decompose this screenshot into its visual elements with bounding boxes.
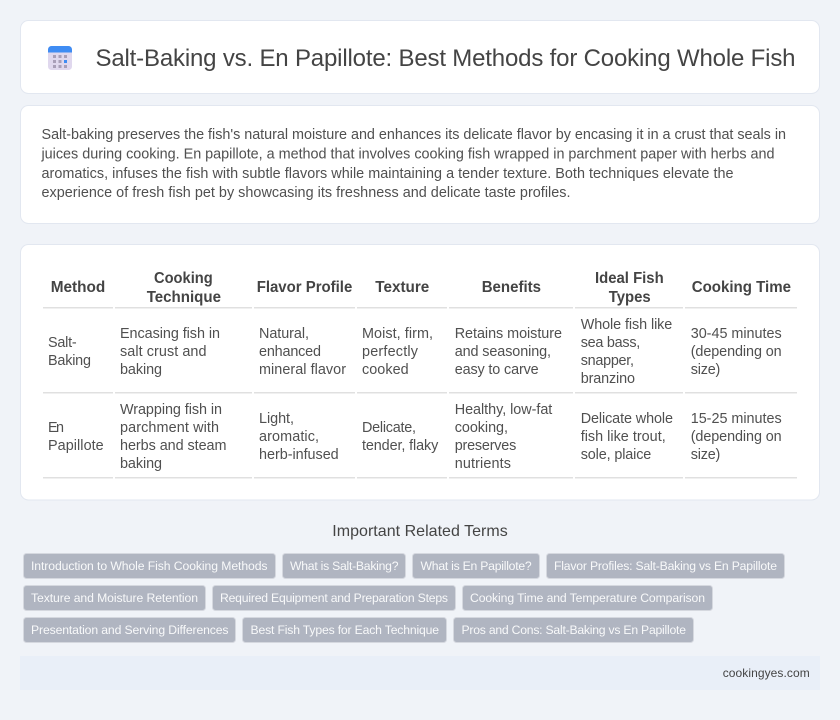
table row: Salt-Baking: Moist, firm,	[362, 326, 433, 342]
table row: Salt-Baking: Baking	[48, 353, 91, 369]
table row: En Papillote: Healthy, low-fat	[455, 402, 552, 418]
footer: cookingyes.com	[723, 666, 810, 680]
chip	[462, 586, 712, 610]
chip: Flavor Profiles: Salt-Baking vs En Papillote	[554, 559, 777, 573]
table row: En Papillote: preserves	[455, 438, 516, 454]
chip	[212, 586, 456, 610]
chip: Pros and Cons: Salt-Baking vs En Papillote	[462, 623, 686, 637]
table row: En Papillote: Delicate,	[362, 420, 416, 436]
related terms chips	[24, 554, 784, 642]
table row: Salt-Baking: perfectly	[362, 344, 419, 360]
panel: introduction	[20, 106, 820, 224]
table row: Salt-Baking: Natural,	[259, 326, 309, 342]
footer	[20, 656, 820, 690]
chip	[24, 554, 276, 578]
table row: En Papillote: Papillote	[48, 438, 104, 454]
table row: Salt-Baking: Whole fish like	[581, 317, 672, 333]
table header row: Cooking	[154, 270, 213, 287]
table row: Salt-Baking: Encasing fish in	[120, 326, 220, 342]
table row: En Papillote: herbs and steam	[120, 438, 226, 454]
table row: En Papillote: cooking,	[455, 420, 508, 436]
table row: En Papillote: tender, flaky	[362, 438, 439, 454]
table header row: Texture	[375, 279, 430, 296]
text block: intro paragraph	[40, 127, 786, 201]
table row: En Papillote: Delicate whole	[581, 411, 673, 427]
table row: Salt-Baking: snapper,	[581, 353, 634, 369]
text block: intro paragraph: Salt-baking preserves the fish's natural moisture and enhances its delicate flavor by encasing it in a crust that seals in	[42, 127, 786, 143]
table header row: Benefits	[482, 279, 541, 296]
text block: intro paragraph: experience of fresh fish pet by showcasing its freshness and delicate taste profiles.	[42, 185, 570, 201]
chip: Required Equipment and Preparation Steps	[220, 591, 448, 605]
chip: Introduction to Whole Fish Cooking Methods	[31, 559, 268, 573]
table row: En Papillote: size)	[691, 447, 720, 463]
table row: Salt-Baking: mineral flavor	[259, 362, 346, 378]
chip	[546, 554, 784, 578]
table row: En Papillote: En	[48, 420, 64, 436]
panel: header	[20, 20, 820, 94]
table row: Salt-Baking: baking	[120, 362, 162, 378]
text block: intro paragraph: juices during cooking. En papillote, a method that involves cooking fish wrapped in parchment paper with herbs and	[40, 146, 774, 162]
table row: En Papillote: baking	[120, 456, 162, 472]
table row: En Papillote: parchment with	[120, 420, 219, 436]
chip	[282, 554, 406, 578]
table row: Salt-Baking	[48, 317, 782, 387]
table row: Salt-Baking: Retains moisture	[455, 326, 562, 342]
chip: Cooking Time and Temperature Comparison	[470, 591, 705, 605]
table header row: Types	[609, 289, 651, 306]
chip: Texture and Moisture Retention	[31, 591, 198, 605]
table row: En Papillote: Light,	[259, 411, 294, 427]
title: Salt-Baking vs. En Papillote: Best Methods for Cooking Whole Fish	[96, 45, 796, 72]
table row: En Papillote: fish like trout,	[581, 429, 666, 445]
text block: intro paragraph: aromatics, infuses the fish with subtle flavors while maintaining a tender texture. Both techniques elevate the	[42, 166, 734, 182]
chip	[24, 618, 236, 642]
chip	[454, 618, 694, 642]
table row: Salt-Baking: enhanced	[259, 344, 321, 360]
heading: related terms: Important Related Terms	[332, 523, 508, 540]
table row: En Papillote: nutrients	[455, 456, 511, 472]
table row: En Papillote: (depending on	[691, 429, 782, 445]
chip: What is En Papillote?	[420, 559, 532, 573]
table header row: Ideal Fish	[595, 270, 664, 287]
chip: Best Fish Types for Each Technique	[250, 623, 439, 637]
table row: Salt-Baking: size)	[691, 362, 720, 378]
table row: Salt-Baking: Salt-	[48, 335, 77, 351]
table header row: Cooking Time	[692, 279, 791, 296]
table row: Salt-Baking: salt crust and	[120, 344, 206, 360]
table row: Salt-Baking: cooked	[362, 362, 409, 378]
table row: En Papillote: aromatic,	[259, 429, 319, 445]
chip: What is Salt-Baking?	[290, 559, 399, 573]
table row: Salt-Baking: and seasoning,	[455, 344, 551, 360]
table row: Salt-Baking: easy to carve	[455, 362, 539, 378]
table row: Salt-Baking: 30-45 minutes	[691, 326, 782, 342]
chip: Presentation and Serving Differences	[31, 623, 228, 637]
table row: En Papillote: 15-25 minutes	[691, 411, 782, 427]
table header row	[51, 270, 791, 306]
table row: En Papillote	[48, 402, 782, 472]
table row: En Papillote: Wrapping fish in	[120, 402, 222, 418]
table header row: Technique	[147, 289, 221, 306]
table header row: Flavor Profile	[257, 279, 353, 296]
table row: Salt-Baking: branzino	[581, 371, 635, 387]
icon: calendar	[48, 46, 72, 70]
table row: Salt-Baking: (depending on	[691, 344, 782, 360]
panel: comparison table	[20, 244, 820, 500]
table row: Salt-Baking: sea bass,	[581, 335, 640, 351]
chip	[242, 618, 446, 642]
table row: En Papillote: sole, plaice	[581, 447, 651, 463]
chip	[412, 554, 540, 578]
table header row: Method	[51, 279, 105, 296]
table row: En Papillote: herb-infused	[259, 447, 339, 463]
chip	[24, 586, 206, 610]
